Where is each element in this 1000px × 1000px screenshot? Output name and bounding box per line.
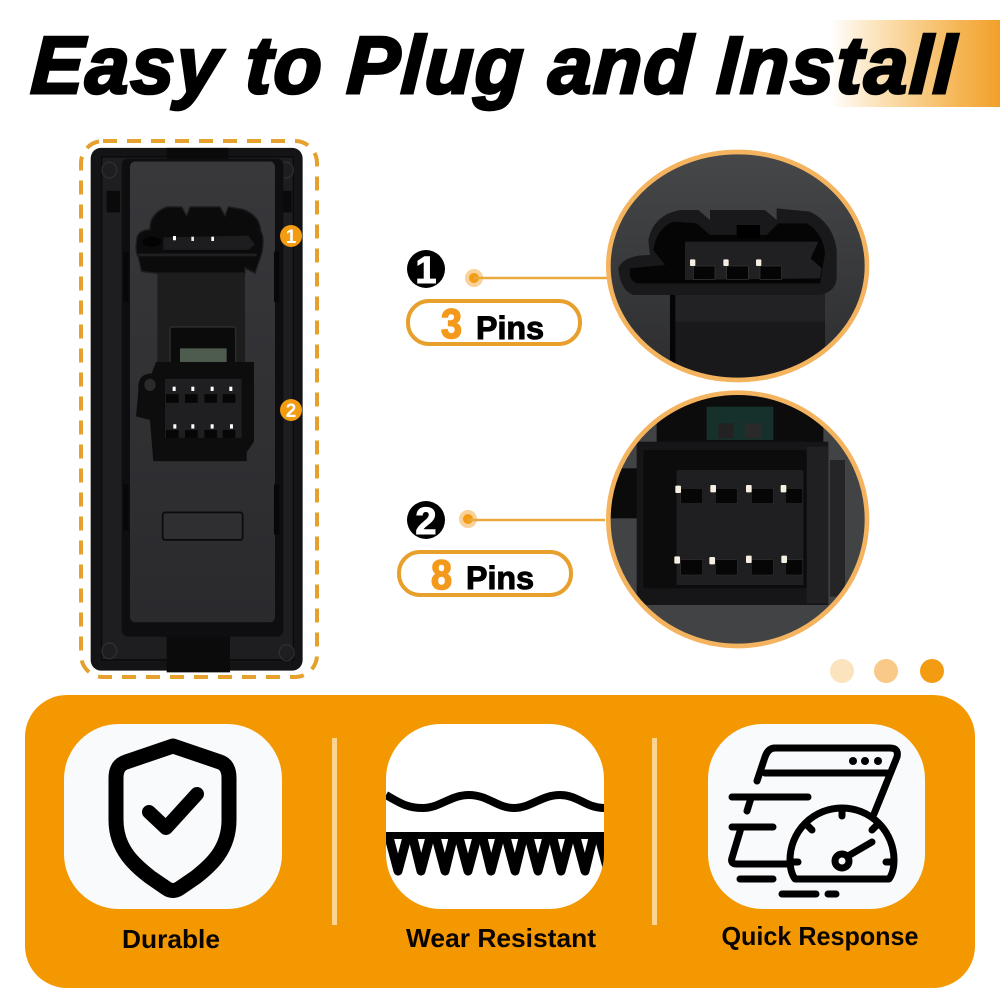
pagination dots	[830, 659, 944, 683]
product photo: window switch back	[91, 148, 303, 672]
pill: 8 Pins: 8	[431, 551, 452, 598]
feature: Durable	[64, 724, 282, 954]
pill: 8 Pins	[399, 551, 571, 598]
zoom circle 2: 8-pin connector	[603, 388, 870, 652]
pill: 3 Pins	[408, 300, 580, 347]
marker 1 on product	[280, 225, 302, 248]
feature: Wear Resistant	[386, 724, 608, 953]
pill: 3 Pins: 3	[441, 300, 462, 347]
callout 1: connector label: 1	[415, 250, 437, 292]
marker 1 on product: 1	[286, 227, 297, 248]
feature: Durable: Durable	[122, 924, 220, 954]
marker 2 on product	[280, 399, 302, 422]
callout 2: connector label: 2	[415, 501, 437, 543]
pill: 8 Pins: Pins	[466, 560, 534, 596]
title highlight gradient	[830, 20, 1000, 107]
feature: Wear Resistant: Wear Resistant	[406, 923, 596, 953]
callout 1: connector label	[407, 250, 612, 292]
panel: features	[25, 695, 975, 988]
zoom circle 1: 3-pin connector	[603, 147, 870, 387]
pill: 3 Pins: Pins	[476, 310, 544, 346]
marker 2 on product: 2	[286, 401, 296, 422]
feature: Quick Response	[708, 724, 925, 951]
title: Easy to Plug and Install	[29, 20, 960, 110]
callout 2: connector label	[407, 501, 605, 543]
feature: Quick Response: Quick Response	[722, 921, 918, 951]
dashed product outline	[81, 141, 317, 677]
